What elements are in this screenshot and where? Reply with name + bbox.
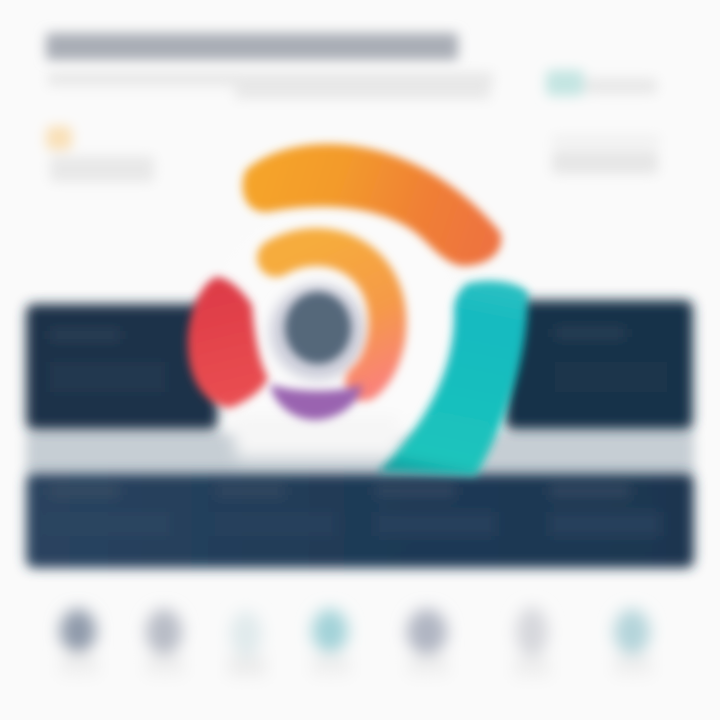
chart: concentric rings (188, 144, 528, 476)
title (46, 33, 458, 60)
subtitle (48, 72, 493, 99)
purple ring segment (270, 384, 362, 420)
white halo (207, 202, 463, 458)
panel: left dark (26, 304, 218, 430)
outer orange arc (242, 144, 501, 266)
icon row (60, 607, 652, 676)
icon 2 (146, 609, 184, 674)
left orange callout (46, 126, 154, 182)
icon 6 (514, 607, 550, 676)
icon 3 (228, 611, 266, 676)
panel: bottom dark (26, 473, 694, 568)
inner orange ring (276, 247, 387, 382)
icon 5 (407, 609, 448, 674)
top right text block (552, 136, 660, 174)
lilac halo (270, 284, 366, 380)
icon 7 (614, 609, 652, 674)
icon 4 (312, 609, 350, 674)
red arc (188, 277, 268, 408)
teal arc (378, 281, 528, 476)
centre circle (285, 292, 351, 364)
gray band (26, 432, 694, 474)
top right legend: teal (546, 70, 657, 96)
panel: right dark (505, 300, 693, 430)
icon 1 (60, 609, 98, 674)
